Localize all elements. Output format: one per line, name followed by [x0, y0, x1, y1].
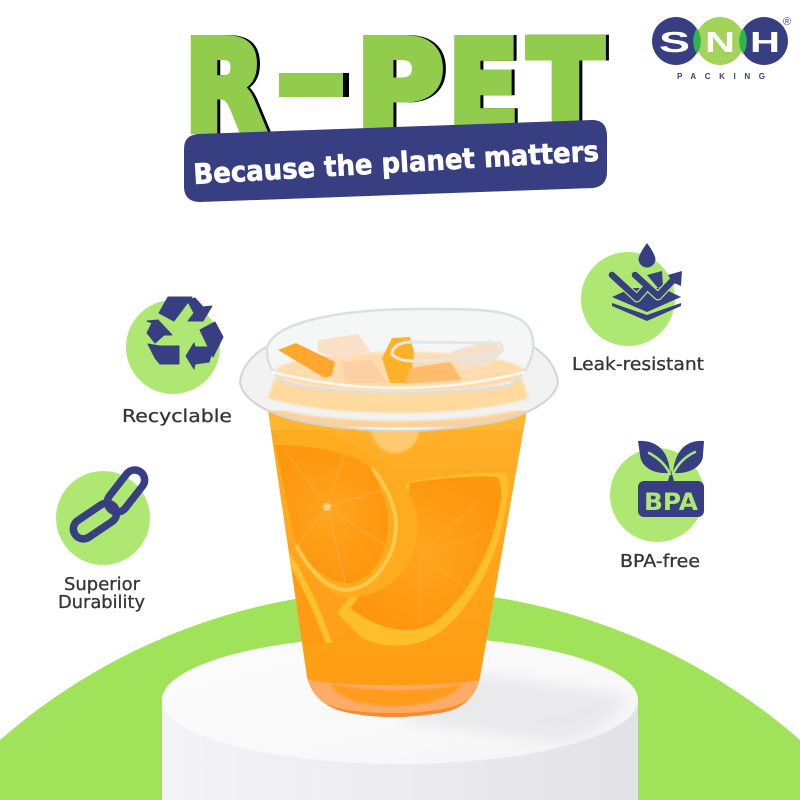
label: Superior Durability: [58, 574, 145, 613]
green arc backdrop: [0, 590, 800, 800]
feature: BPA-free: [610, 441, 704, 572]
icon: recycle: [126, 297, 223, 394]
lid brim: [240, 345, 558, 431]
orange slice lower left: [290, 554, 332, 643]
title: R-PET: P: [356, 15, 444, 160]
title: R-PET: P: [359, 15, 447, 160]
icon: BPA leaf: BPA: [644, 488, 698, 516]
feature: Recyclable: [122, 297, 232, 427]
feature: Leak-resistant: [572, 243, 704, 375]
orange slice left: [268, 412, 418, 597]
title: R-PET: T: [531, 15, 606, 160]
icon: leak-resistant layers: [581, 243, 682, 346]
logo: SNH Packing: [652, 16, 791, 81]
label: Recyclable: Recyclable: [122, 406, 232, 427]
title: R-PET: T: [528, 15, 603, 160]
cup base: [308, 680, 480, 717]
logo: SNH Packing: H: [750, 27, 780, 59]
title: R-PET: [184, 15, 606, 160]
title: R-PET: E: [448, 15, 519, 160]
icon: chain: [56, 466, 150, 565]
logo: SNH Packing: PACKING: [677, 72, 765, 81]
product: cup of orange juice: [240, 309, 558, 725]
logo: SNH Packing: ®: [783, 16, 791, 28]
cup body: [268, 412, 526, 717]
label: Leak-resistant: Leak-resistant: [572, 354, 704, 375]
logo: SNH Packing: N: [705, 27, 735, 59]
tagline text: Because the planet matters: [193, 135, 600, 191]
podium: [162, 636, 638, 800]
label: Superior Durability: Superior: [64, 574, 141, 595]
title: R-PET: R: [188, 15, 268, 160]
label: Superior Durability: Durability: [58, 592, 145, 613]
lid dome: [267, 309, 533, 393]
orange slice right: [337, 473, 508, 646]
feature: Superior Durability: [56, 466, 150, 613]
logo: SNH Packing: S: [659, 27, 690, 59]
title: R-PET: E: [451, 15, 522, 160]
tagline banner: [184, 120, 607, 202]
title: R-PET: R: [184, 15, 266, 160]
ice cube in cup: [370, 431, 420, 454]
label: BPA-free: BPA-free: [620, 551, 700, 572]
